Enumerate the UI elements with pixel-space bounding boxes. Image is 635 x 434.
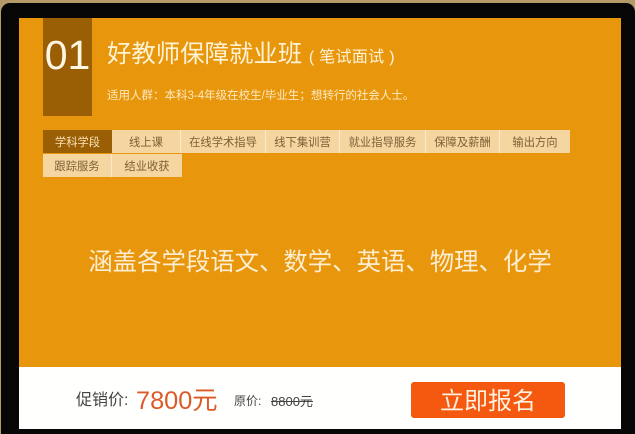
tab: output direction: 输出方向 bbox=[512, 137, 558, 149]
tab: outcomes: 结业收获 bbox=[124, 161, 170, 173]
original price: 8800元 bbox=[271, 394, 313, 409]
tab: follow-up service: 跟踪服务 bbox=[54, 161, 100, 173]
tab: follow-up service bbox=[43, 154, 112, 177]
tab: offline camp: 线下集训营 bbox=[274, 137, 331, 149]
sign-up button bbox=[411, 382, 565, 418]
number badge: 01 bbox=[45, 32, 90, 78]
tab: online classes bbox=[112, 130, 181, 153]
tab: online classes: 线上课 bbox=[129, 137, 163, 149]
tab: active bbox=[43, 130, 112, 153]
target audience text: 适用人群：本科3-4年级在校生/毕业生；想转行的社会人士。 bbox=[107, 90, 414, 102]
tab: active: 学科学段 bbox=[55, 137, 100, 149]
tab: job guidance: 就业指导服务 bbox=[349, 137, 416, 149]
tab bar bbox=[43, 130, 570, 177]
panel: price bar bbox=[19, 367, 621, 429]
sign-up button: 立即报名 bbox=[440, 388, 536, 415]
tab: salary guarantee: 保障及薪酬 bbox=[434, 137, 491, 149]
promo price: 7800元 bbox=[136, 387, 218, 415]
promo price label: 促销价: bbox=[76, 392, 128, 409]
tab: offline camp bbox=[266, 130, 340, 153]
tab: salary guarantee bbox=[426, 130, 500, 153]
main statement: 涵盖各学段语文、数学、英语、物理、化学 bbox=[88, 249, 552, 276]
tab: job guidance bbox=[340, 130, 426, 153]
course title: 好教师保障就业班 ( 笔试面试 ) bbox=[107, 41, 395, 68]
original price label: 原价: bbox=[234, 394, 261, 408]
tab: online tutoring: 在线学术指导 bbox=[189, 137, 257, 149]
tab: online tutoring bbox=[181, 130, 266, 153]
number badge bbox=[43, 18, 92, 116]
tab: output direction bbox=[500, 130, 570, 153]
panel: orange course card bbox=[19, 18, 621, 367]
tab: outcomes bbox=[112, 154, 182, 177]
